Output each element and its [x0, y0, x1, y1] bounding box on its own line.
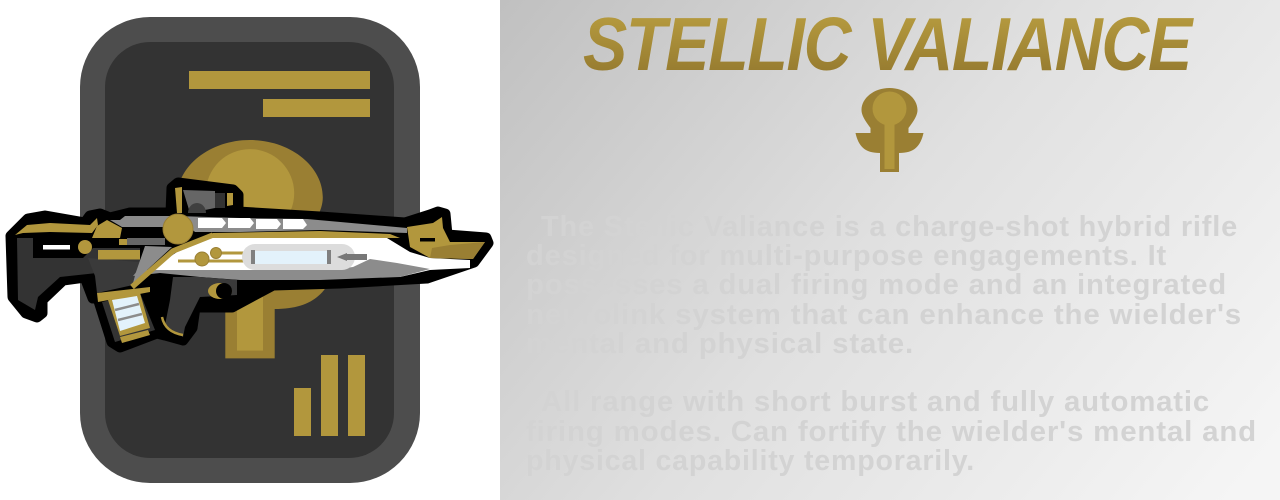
icon: stat bars	[294, 355, 365, 436]
upper grey rail	[177, 216, 407, 233]
arrow marking	[337, 253, 367, 261]
pivot circle	[163, 214, 193, 244]
icon: small emblem	[856, 88, 924, 172]
grey triangle	[133, 246, 172, 283]
stock slot	[43, 245, 70, 250]
grey blade	[133, 259, 430, 280]
text block: description: mental and physical state.	[526, 328, 914, 360]
white body	[147, 238, 470, 277]
panel: grey gradient right background	[500, 0, 1280, 500]
lower receiver	[88, 258, 140, 293]
text block: description: designed for multi-purpose engagements. It	[526, 240, 1167, 272]
circuit lines	[178, 253, 245, 261]
stock top gold	[15, 218, 98, 235]
white rail segments	[198, 218, 307, 229]
panel: weapon card	[80, 17, 420, 483]
title: STELLIC VALIANCE	[583, 3, 1194, 87]
text block: description: neurolink system that can enhance the wielder's	[526, 299, 1242, 331]
text block: description: possesses a dual firing mode and an integrated	[526, 269, 1227, 301]
gold rail line	[205, 231, 400, 238]
energy capsule	[242, 244, 355, 270]
text block: description: The Stellic Valiance is a charge-shot hybrid rifle	[541, 211, 1238, 243]
magazine	[97, 287, 155, 343]
text block: capabilities: physical capability temporarily.	[526, 445, 975, 477]
icon: rifle illustration	[11, 183, 488, 347]
text block: capabilities: firing modes. Can fortify the wielder's mental and	[526, 416, 1257, 448]
text block: description	[526, 211, 1242, 360]
rifle black outline	[11, 183, 488, 347]
text block: capabilities	[526, 386, 1257, 477]
muzzle gold block	[407, 217, 485, 259]
text block: capabilities: All range with short burst and fully automatic	[541, 386, 1210, 418]
receiver grey	[110, 216, 177, 227]
rifle stock	[17, 238, 140, 310]
grip	[162, 277, 237, 337]
panel: white left background	[0, 0, 500, 500]
scope	[175, 187, 233, 213]
gold diagonal strut	[132, 235, 213, 287]
receiver gold	[92, 220, 122, 238]
icon: top gold bars	[189, 71, 370, 117]
icon: large emblem	[162, 140, 338, 358]
